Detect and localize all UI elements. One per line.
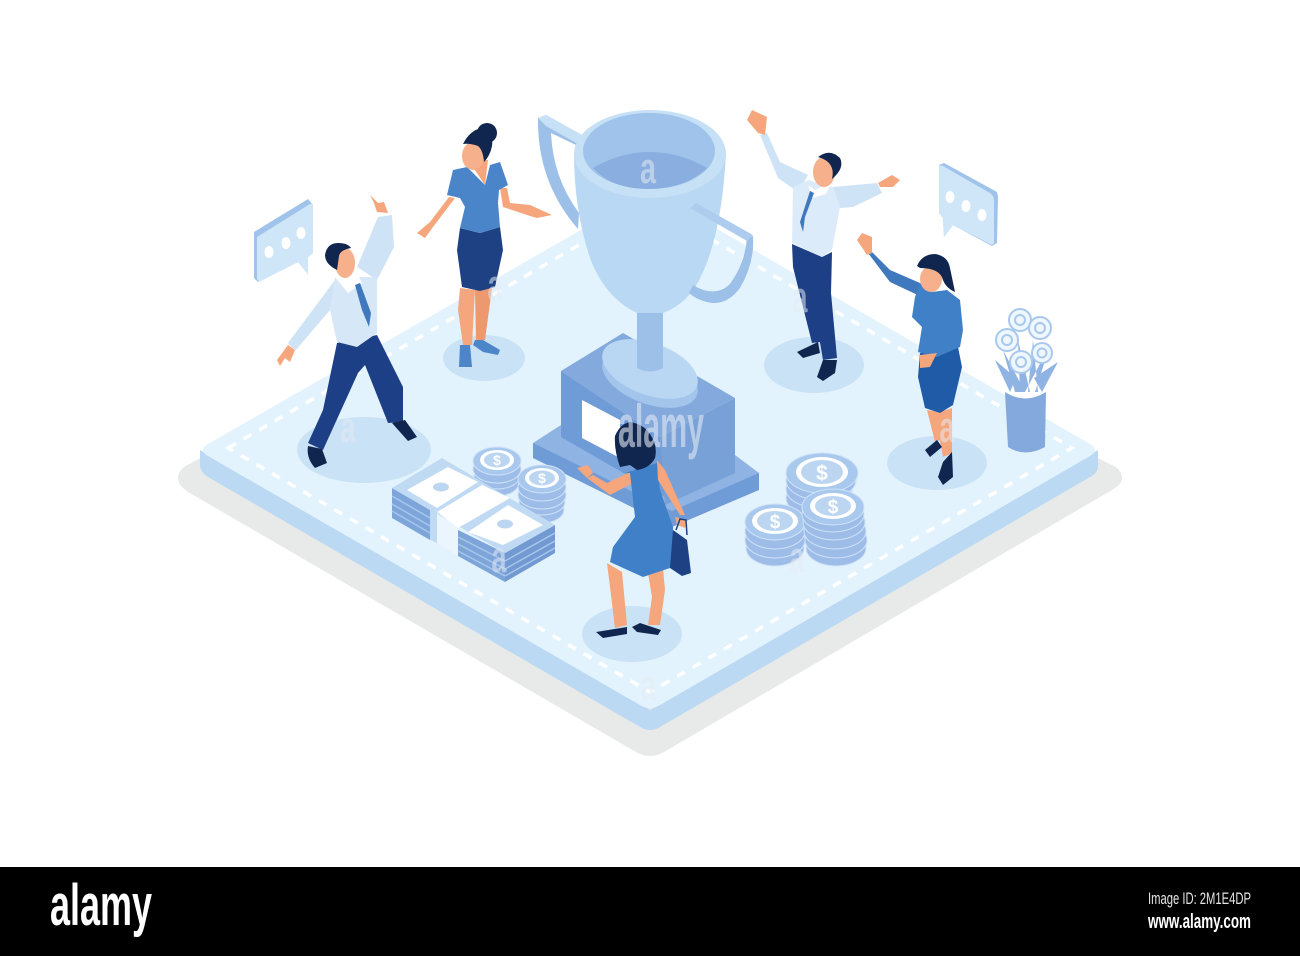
website: www.alamy.com xyxy=(1147,911,1251,933)
cash bundles xyxy=(392,458,555,582)
shoes xyxy=(308,420,417,468)
skirt xyxy=(918,347,962,413)
hair xyxy=(325,243,351,270)
trophy stem xyxy=(637,310,663,372)
blank plaque xyxy=(582,400,620,458)
person: man pointing left xyxy=(277,195,417,468)
raised hand xyxy=(370,195,388,213)
right arm and hand xyxy=(500,188,552,218)
right handle xyxy=(689,203,753,303)
raised left arm xyxy=(760,133,808,192)
leaves xyxy=(995,340,1058,392)
sweater xyxy=(912,283,963,357)
flower vase xyxy=(995,309,1058,452)
left arm and hand xyxy=(417,197,455,238)
outstretched right arm xyxy=(833,183,882,208)
platform top xyxy=(203,193,1095,708)
watermark letters: a xyxy=(640,144,656,193)
hair xyxy=(463,128,492,162)
hair xyxy=(917,254,955,292)
raised arm xyxy=(868,252,922,297)
blouse xyxy=(447,162,508,233)
bills top white xyxy=(407,467,478,508)
person: woman pointing right xyxy=(417,123,552,367)
hands xyxy=(747,110,900,187)
dollar sign: $ xyxy=(816,462,828,485)
trophy cup xyxy=(574,153,726,313)
cup liquid xyxy=(593,152,707,189)
lowered arm xyxy=(288,280,335,351)
floor circles under people xyxy=(297,335,987,662)
head xyxy=(813,157,835,187)
bill emblems xyxy=(433,482,449,492)
collar xyxy=(808,182,832,198)
trophy plinth xyxy=(533,425,759,527)
lower hand xyxy=(920,353,937,368)
shoes xyxy=(459,340,500,367)
right bundle right side xyxy=(505,525,555,582)
watermark letters: a xyxy=(492,533,507,582)
shirt torso xyxy=(330,277,377,347)
right bundle left side xyxy=(458,530,505,582)
coin stacks right xyxy=(745,453,867,566)
cup rim xyxy=(574,110,726,198)
left bundle side xyxy=(392,488,430,540)
watermark letters: a xyxy=(940,403,955,452)
legs xyxy=(607,563,665,628)
raised arm xyxy=(357,215,394,280)
legs xyxy=(458,288,475,345)
vase xyxy=(1005,392,1046,452)
left handle xyxy=(538,115,582,229)
watermark letters: a xyxy=(792,273,808,322)
shirt xyxy=(792,180,840,257)
dollar sign: $ xyxy=(493,452,501,468)
hair xyxy=(818,153,841,179)
person: woman waving xyxy=(857,233,963,485)
reaching arm xyxy=(587,472,633,495)
platform shadow xyxy=(178,458,1122,756)
hand on bag xyxy=(675,517,687,528)
raised hand xyxy=(857,233,872,255)
hair xyxy=(615,422,656,470)
dollar sign: $ xyxy=(538,470,546,486)
watermark letters: a xyxy=(640,661,656,710)
shoes xyxy=(797,342,837,381)
platform side xyxy=(200,450,1098,730)
collar xyxy=(335,273,362,293)
isometric platform xyxy=(200,193,1098,730)
head xyxy=(462,142,484,170)
watermark letters: a xyxy=(340,403,356,452)
trophy pedestal xyxy=(561,333,735,505)
person: man cheering xyxy=(747,110,900,381)
watermark center: alamy xyxy=(618,393,704,460)
top bundle face xyxy=(392,458,555,553)
dollar sign: $ xyxy=(828,497,839,518)
skirt xyxy=(457,227,503,291)
footer logo: alamy xyxy=(50,873,152,938)
speech bubble left xyxy=(254,199,313,282)
watermark letters: a xyxy=(488,261,503,310)
tie xyxy=(800,191,814,232)
watermark letters: a xyxy=(790,533,805,582)
tie xyxy=(355,283,371,327)
trousers xyxy=(792,244,837,360)
head xyxy=(920,266,942,292)
hand xyxy=(577,465,593,478)
image id: Image ID: 2M1E4DP xyxy=(1148,889,1251,908)
shoes xyxy=(596,623,661,638)
bill layer lines xyxy=(392,496,555,576)
speech bubble right xyxy=(939,163,998,246)
footer bar xyxy=(0,867,1300,956)
cup inside xyxy=(583,113,715,189)
platform dashed outline xyxy=(228,204,1072,692)
left bundle wrap edge xyxy=(430,510,437,543)
person: woman in dress at trophy xyxy=(577,422,691,638)
lowered hand xyxy=(277,345,295,366)
shoes xyxy=(925,440,953,485)
head xyxy=(335,248,355,278)
neck xyxy=(468,160,488,185)
trophy base disc xyxy=(594,327,706,420)
arm to bag xyxy=(657,460,685,515)
legs xyxy=(927,408,952,457)
coin stacks left xyxy=(473,447,566,523)
handbag xyxy=(670,519,691,576)
flowers xyxy=(996,309,1052,373)
band side xyxy=(437,512,458,556)
watermark letters xyxy=(340,144,955,710)
dress xyxy=(610,463,673,577)
dollar sign: $ xyxy=(770,512,781,533)
trophy xyxy=(533,110,759,527)
legs xyxy=(308,335,403,450)
